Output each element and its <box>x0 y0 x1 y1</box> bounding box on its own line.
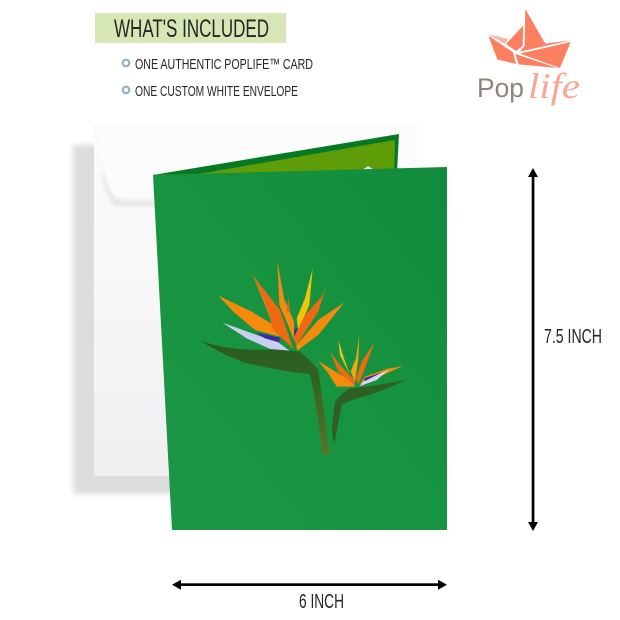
item: envelope: ONE CUSTOM WHITE ENVELOPE <box>135 83 298 100</box>
arrow: width <box>172 580 447 590</box>
logo: poplife <box>477 9 580 106</box>
label: width: 6 INCH <box>299 591 344 613</box>
logo wordmark: Pop <box>477 73 524 103</box>
illustration: bird of paradise flowers <box>200 261 407 454</box>
card back panel <box>153 134 399 175</box>
small leaf and stem <box>332 380 407 445</box>
arrow: height <box>528 168 538 531</box>
large leaf and stem <box>200 341 329 454</box>
logo wordmark <box>477 66 580 106</box>
item: card <box>123 56 313 73</box>
heading: what's included: WHAT'S INCLUDED <box>114 15 269 43</box>
icon: origami boat <box>488 9 571 68</box>
list: included items <box>123 56 313 100</box>
card front <box>153 167 447 530</box>
envelope <box>94 122 423 476</box>
envelope flap <box>94 122 423 206</box>
envelope shadow <box>73 145 183 494</box>
item: card: ONE AUTHENTIC POPLIFE™ CARD <box>135 56 313 73</box>
logo wordmark: life <box>528 66 580 106</box>
large flower <box>218 261 344 351</box>
small flower <box>318 335 403 387</box>
heading: what's included <box>95 13 286 43</box>
item: envelope <box>123 83 298 100</box>
